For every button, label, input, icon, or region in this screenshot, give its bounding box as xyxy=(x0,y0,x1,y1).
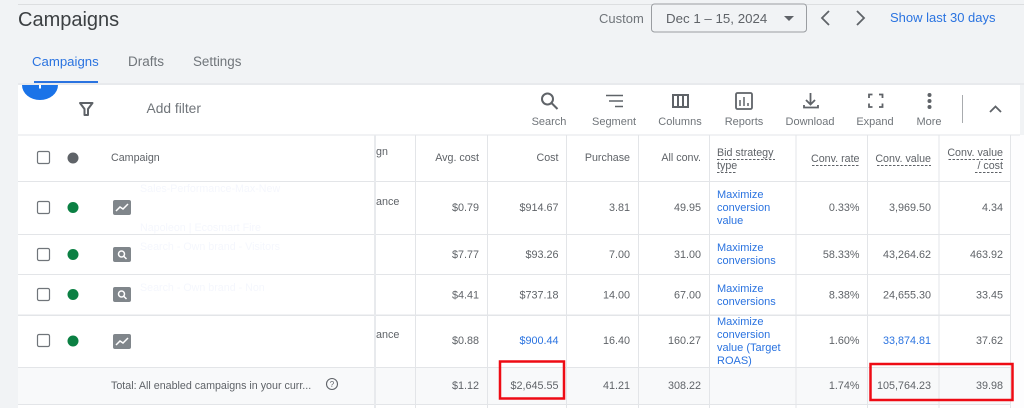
campaign row 2: Search - Own brand - Visitors xyxy=(140,241,280,253)
campaign row 1 xyxy=(38,183,1003,234)
campaign row 1: 4.34 xyxy=(982,202,1003,214)
table grid xyxy=(18,134,1020,408)
campaign row 3: 8.38% xyxy=(829,290,860,302)
campaign row 4: value (Target xyxy=(717,342,781,354)
campaign row 3: Maximize xyxy=(717,283,763,295)
campaign row 3: 14.00 xyxy=(603,290,630,302)
campaign row 4: Maximize xyxy=(717,316,763,328)
header row: / cost xyxy=(977,160,1003,172)
toolbar: Search xyxy=(532,116,566,128)
campaign row 3: $737.18 xyxy=(519,290,558,302)
campaign row 1: 3,969.50 xyxy=(889,202,931,214)
campaign row 3: Search - Own brand - Non xyxy=(140,282,265,294)
total row: $2,645.55 xyxy=(510,380,558,392)
campaign row 3: $4.41 xyxy=(452,290,479,302)
toolbar xyxy=(22,85,1001,128)
toolbar: Columns xyxy=(658,116,702,128)
header row xyxy=(38,146,1003,172)
campaign row 4: $0.88 xyxy=(452,335,479,347)
toolbar: Download xyxy=(786,116,834,128)
campaign row 2: 31.00 xyxy=(674,249,701,261)
campaign row 4: 16.40 xyxy=(603,335,630,347)
campaign row 1: $914.67 xyxy=(519,202,558,214)
icon: reports xyxy=(736,93,752,109)
campaign row 4: ance xyxy=(376,329,399,341)
campaign row 1: Maximize xyxy=(717,189,763,201)
campaign row 1: value xyxy=(717,215,743,227)
icon: download xyxy=(804,93,818,108)
icon: add button xyxy=(22,85,58,100)
header row: type xyxy=(717,160,737,172)
toolbar: Segment xyxy=(592,116,636,128)
campaign row 3: 33.45 xyxy=(976,290,1003,302)
toolbar: More xyxy=(916,116,942,128)
total row: Total: All enabled campaigns in your curr... xyxy=(111,380,311,392)
campaign row 1: $0.79 xyxy=(452,202,479,214)
header row: Conv. rate xyxy=(811,153,860,165)
campaign row 4: 37.62 xyxy=(976,335,1003,347)
campaign row 2: 7.00 xyxy=(609,249,630,261)
title: Campaigns xyxy=(18,9,119,31)
campaign row 4: 160.27 xyxy=(668,335,701,347)
icon: columns xyxy=(673,95,688,107)
icon: header checkbox xyxy=(38,152,50,164)
header row: All conv. xyxy=(661,152,701,164)
campaign row 1: conversion xyxy=(717,202,770,214)
campaign row 2: 43,264.62 xyxy=(883,249,931,261)
date range controls xyxy=(599,4,996,32)
campaign row 4: conversion xyxy=(717,329,770,341)
campaign row 2: 58.33% xyxy=(823,249,860,261)
total row background xyxy=(18,368,1011,404)
header row: gn xyxy=(376,146,388,158)
callout: conversion value and ROAS highlight xyxy=(870,364,1012,400)
campaign row 3 xyxy=(38,282,1003,308)
icon: more xyxy=(928,93,932,109)
campaign row 4: 1.60% xyxy=(829,335,860,347)
campaign row 2: Maximize xyxy=(717,242,763,254)
icon: expand xyxy=(869,94,882,107)
icon: next arrow xyxy=(857,11,864,25)
campaign row 2: $93.26 xyxy=(525,249,558,261)
icon: header status dot xyxy=(68,152,78,164)
show last 30 days link: Show last 30 days xyxy=(890,10,996,25)
date picker xyxy=(652,4,806,32)
campaign row 1: ance xyxy=(376,196,399,208)
campaign row 4 xyxy=(38,316,1003,367)
campaign row 2 xyxy=(38,241,1003,267)
campaign row 1: Napoleon | Ecosmart Fire xyxy=(140,222,261,234)
tabs: Drafts xyxy=(128,54,164,69)
header row: Cost xyxy=(537,152,559,164)
toolbar: Expand xyxy=(856,116,894,128)
total row xyxy=(111,378,1003,392)
campaign row 3: 67.00 xyxy=(674,290,701,302)
icon: filter xyxy=(80,103,92,115)
panel: campaigns table card xyxy=(18,83,1024,408)
tabs: Settings xyxy=(193,54,242,69)
total row: 1.74% xyxy=(829,380,860,392)
campaign row 1: Sales-Performance-Max-New xyxy=(140,183,280,195)
campaign row 4: 33,874.81 xyxy=(883,335,931,347)
icon: previous arrow xyxy=(822,11,829,25)
campaign row 4: ROAS) xyxy=(717,355,752,367)
total row: 105,764.23 xyxy=(877,380,931,392)
campaign row 3: 24,655.30 xyxy=(883,290,931,302)
header row: Campaign xyxy=(111,152,160,164)
campaign row 1: 0.33% xyxy=(829,202,860,214)
icon: search xyxy=(542,94,558,109)
icon: help xyxy=(326,378,338,390)
campaign row 1: 3.81 xyxy=(609,202,630,214)
campaign row 2: $7.77 xyxy=(452,249,479,261)
total row: 39.98 xyxy=(976,380,1003,392)
custom label: Custom xyxy=(599,11,644,26)
header row: Bid strategy xyxy=(717,147,774,159)
callout: total cost highlight xyxy=(500,362,564,398)
campaign row 3: conversions xyxy=(717,296,776,308)
campaign row 2: conversions xyxy=(717,255,776,267)
tabs: Campaigns xyxy=(32,54,99,69)
icon: segment xyxy=(606,96,623,106)
campaign row 1: 49.95 xyxy=(674,202,701,214)
campaign row 2: 463.92 xyxy=(970,249,1003,261)
add filter: Add filter xyxy=(146,101,201,116)
header row: Conv. value xyxy=(875,153,931,165)
campaign row 4: $900.44 xyxy=(519,335,558,347)
header row: Avg. cost xyxy=(435,152,479,164)
tabs xyxy=(32,54,242,83)
icon: collapse xyxy=(990,106,1001,112)
header row: Conv. value xyxy=(947,147,1003,159)
icon: help: ? xyxy=(330,380,335,389)
total row: $1.12 xyxy=(452,380,479,392)
total row: 308.22 xyxy=(668,380,701,392)
header row: Purchase xyxy=(585,152,630,164)
date picker: Dec 1 – 15, 2024 xyxy=(666,11,767,26)
toolbar: Reports xyxy=(725,116,764,128)
total row: 41.21 xyxy=(603,380,630,392)
